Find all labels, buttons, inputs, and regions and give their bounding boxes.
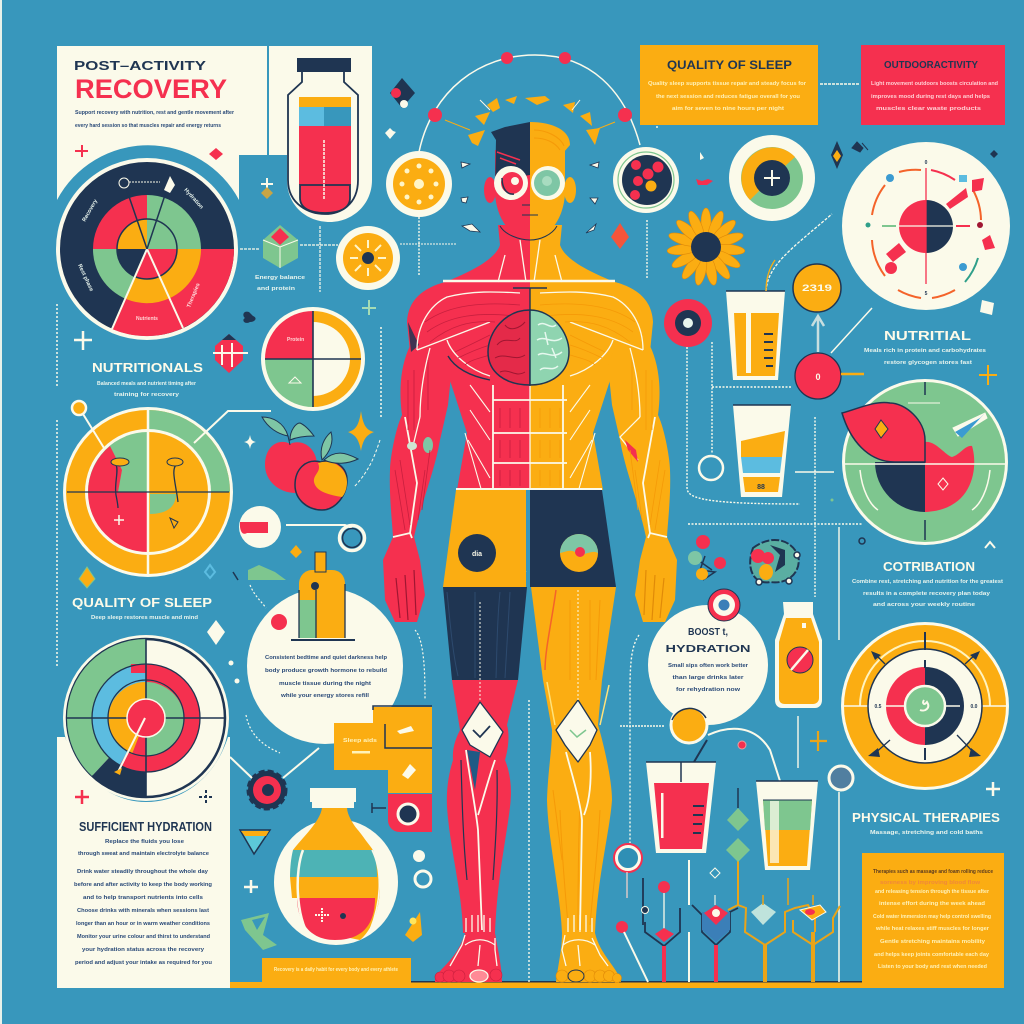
icon: juice glass two: 88	[757, 484, 765, 491]
dashed verticals	[529, 60, 862, 982]
title	[74, 58, 227, 104]
shorts badge left: dia	[472, 551, 482, 558]
header panel	[57, 46, 267, 200]
jar panel	[269, 46, 372, 222]
title: nutritionals: training for recovery	[114, 392, 180, 398]
halo arc	[390, 52, 640, 152]
hydration circle: Small sips often work better	[668, 663, 749, 669]
radial chart: therapy wheel: 0.5	[875, 704, 882, 710]
chart: branching tree	[614, 741, 840, 982]
orange tabs: Sleep aids	[343, 738, 377, 744]
icon: sunflower	[667, 208, 745, 286]
orange tabs	[334, 706, 432, 942]
icon: gem diamond: Energy balance	[255, 275, 305, 281]
title: nutritionals: NUTRITIONALS	[92, 360, 203, 375]
box: outdoor activity: improves mood during rest days and helps	[871, 94, 990, 100]
body text: through sweat and maintain electrolyte balance	[78, 851, 209, 857]
knees	[462, 590, 609, 930]
small decor left	[57, 304, 381, 668]
box: outdoor activity: muscles clear waste products	[876, 106, 981, 112]
title: nutritial	[864, 328, 986, 366]
title: nutritionals: Balanced meals and nutrient timing after	[97, 381, 197, 387]
body text: Replace the fluids you lose	[105, 839, 184, 845]
box: outdoor activity: Light movement outdoors boosts circulation and	[871, 81, 998, 87]
icon: juice glass one	[726, 214, 832, 380]
pie chart: quarters	[261, 307, 365, 411]
box: physical therapies text: and releasing tension through the tissue after	[875, 889, 990, 895]
icon: orange slice	[336, 226, 400, 290]
body text: before and after activity to keep the body working	[74, 882, 212, 888]
shorts badge left	[458, 534, 496, 572]
head	[484, 122, 576, 240]
neck and chest lines	[393, 240, 667, 572]
panel: sufficient hydration	[57, 737, 230, 988]
small marks right	[696, 141, 998, 315]
heading: SUFFICIENT HYDRATION	[79, 820, 212, 834]
icon: juice glass two	[699, 405, 791, 497]
bottom banner	[230, 958, 862, 988]
body text: and to help transport nutrients into cells	[83, 895, 203, 901]
badge: red dot: 0	[815, 372, 821, 382]
title: cotribation: and across your weekly routine	[873, 602, 975, 608]
dashed connectors	[228, 585, 425, 753]
box: quality of sleep	[640, 45, 818, 125]
pie chart: quarters: Protein	[287, 337, 304, 343]
hydration circle: for rehydration now	[676, 687, 741, 693]
icon: berry bowl	[400, 147, 679, 278]
body text: period and adjust your intake as required for you	[75, 960, 212, 966]
icon: cream button	[239, 506, 364, 550]
box: physical therapies text: Gentle stretching maintains mobility	[880, 939, 986, 945]
organ: brain lungs	[488, 310, 569, 385]
box: physical therapies text: intense effort during the week ahead	[879, 901, 985, 907]
connector tubes	[671, 707, 798, 781]
title: physical therapies: Massage, stretching and cold baths	[870, 830, 983, 836]
chart: green plate	[842, 379, 1008, 545]
icon: molecules	[688, 535, 800, 585]
box: physical therapies text: Therapies such as massage and foam rolling reduce	[873, 869, 993, 875]
icon: gear	[230, 748, 319, 809]
bottom banner: Recovery is a daily habit for every body and every athlete	[274, 967, 398, 973]
chart: body plate: 0	[925, 160, 928, 166]
title: quality of sleep	[72, 595, 212, 621]
title: cotribation: COTRIBATION	[883, 559, 975, 574]
intro text: every hard session so that muscles repair and energy returns	[75, 123, 221, 129]
radial chart: recovery wheel: Rest phase	[76, 263, 94, 292]
title: POST–ACTIVITY	[74, 58, 206, 73]
icon: pink beaker	[646, 762, 716, 853]
icon: flask	[274, 788, 398, 945]
box: outdoor activity: OUTDOORACTIVITY	[884, 60, 978, 71]
info circle: body produce growth hormone to rebuild	[265, 668, 387, 674]
icon: ring top	[708, 589, 740, 621]
title: cotribation	[852, 559, 1003, 608]
feet lines	[450, 915, 608, 982]
badge: red dot	[795, 353, 864, 399]
radial chart: recovery wheel: Recovery	[82, 198, 100, 223]
title: cotribation: results in a complete recovery plan today	[863, 591, 991, 597]
radial chart: recovery wheel	[56, 158, 238, 340]
icon: bottle tower	[291, 552, 355, 640]
muscle fibres	[395, 304, 665, 530]
body: left half	[383, 225, 530, 622]
box: physical therapies text: soreness by improving blood flow	[880, 880, 981, 886]
radial chart: therapy wheel	[841, 622, 1009, 790]
intro text: Support recovery with nutrition, rest and gentle movement after	[75, 110, 235, 116]
title: quality of sleep: Deep sleep restores muscle and mind	[91, 615, 198, 621]
chart: body plate	[842, 142, 1010, 310]
icon: jar	[288, 58, 358, 214]
box: physical therapies text	[862, 853, 1004, 988]
icon: coral diamond	[611, 223, 629, 249]
icon: gold spark	[810, 731, 1000, 796]
radial chart: nutrition wheel	[63, 401, 271, 577]
sparkles left	[74, 128, 395, 350]
box: quality of sleep: aim for seven to nine hours per night	[672, 106, 784, 112]
body text	[74, 839, 212, 966]
shorts	[443, 489, 616, 587]
icon: apples	[244, 411, 380, 510]
radial chart: therapy wheel: 0.0	[971, 704, 978, 710]
icon: citrus circle	[386, 151, 452, 217]
title: physical therapies: PHYSICAL THERAPIES	[852, 811, 1000, 825]
title: quality of sleep: QUALITY OF SLEEP	[72, 595, 212, 610]
box: quality of sleep: QUALITY OF SLEEP	[667, 58, 792, 72]
radial chart: recovery wheel: Nutrients	[136, 316, 158, 322]
elbow organs	[407, 437, 638, 462]
title: cotribation: Combine rest, stretching and nutrition for the greatest	[852, 579, 1003, 585]
icon: target ring	[664, 299, 712, 347]
body text: your hydration status across the recovery	[82, 947, 205, 953]
radial chart: sleep wheel	[63, 635, 229, 801]
info circle: while your energy stores refill	[280, 693, 370, 699]
icon: gem diamond: and protein	[257, 286, 296, 292]
box: physical therapies text: while heat relaxes stiff muscles for longer	[875, 926, 990, 932]
info circle: muscle tissue during the night	[279, 681, 371, 687]
radial chart: recovery wheel: Hydration	[183, 187, 205, 211]
title: nutritionals	[92, 360, 203, 398]
box: quality of sleep: Quality sleep supports tissue repair and steady focus for	[648, 81, 807, 87]
box: quality of sleep: the next session and reduces fatigue overall for you	[656, 94, 800, 100]
title: RECOVERY	[75, 74, 227, 104]
icon: gem diamond	[240, 225, 338, 292]
badge: year	[793, 264, 872, 353]
body text: Monitor your urine colour and thirst to understand	[77, 934, 210, 940]
info circle	[247, 552, 403, 744]
badge: year: 2319	[802, 283, 832, 293]
icon: pin marker	[213, 334, 248, 373]
body: right half	[530, 225, 677, 622]
navy shoulder line	[448, 288, 547, 380]
body text: Choose drinks with minerals when sessions last	[77, 908, 209, 914]
intro text	[75, 110, 235, 129]
hydration circle: than large drinks later	[672, 675, 745, 681]
chart: body plate: 5	[925, 291, 928, 297]
box: physical therapies text: Listen to your body and rest when needed	[878, 964, 987, 970]
title: physical therapies	[852, 811, 1000, 836]
small face sparkles	[461, 162, 599, 233]
hydration circle: HYDRATION	[666, 643, 750, 655]
title: nutritial: Meals rich in protein and carbohydrates	[864, 348, 986, 354]
hydration circle: BOOST t,	[688, 627, 728, 638]
title: nutritial: NUTRITIAL	[884, 328, 971, 343]
body text: longer than an hour or in warm weather conditions	[76, 921, 210, 927]
right leg	[531, 587, 622, 982]
box: physical therapies text: Cold water immersion may help control swelling	[873, 914, 991, 920]
info circle: Consistent bedtime and quiet darkness help	[265, 655, 388, 661]
box: physical therapies text: and helps keep joints comfortable each day	[874, 952, 990, 958]
radial chart: recovery wheel: Therapies	[186, 282, 202, 309]
left leg	[435, 587, 527, 982]
panel: figure	[383, 122, 677, 982]
icon: green beaker	[756, 766, 853, 982]
hydration circle	[648, 589, 768, 725]
box: outdoor activity	[820, 45, 1005, 125]
icon: drink bottle	[775, 602, 822, 708]
body text: Drink water steadily throughout the whole day	[77, 869, 209, 875]
icon: plus dial	[729, 135, 815, 221]
decor right	[830, 365, 997, 548]
icon: triangle gem	[240, 830, 277, 950]
shorts badge right	[560, 534, 598, 572]
title: nutritial: restore glycogen stores fast	[884, 360, 972, 366]
